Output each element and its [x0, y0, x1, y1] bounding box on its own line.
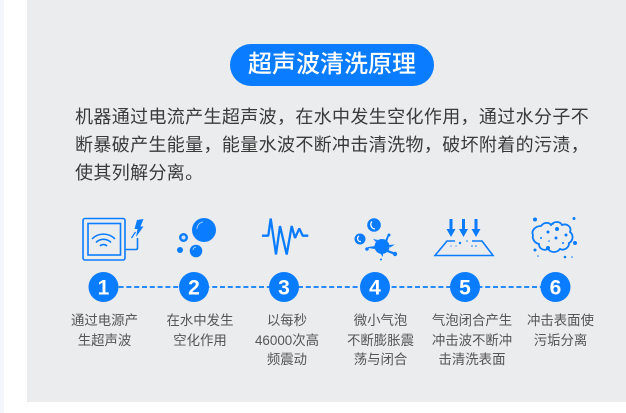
icon: vibration waveform — [262, 218, 308, 254]
title — [230, 44, 434, 86]
intro text block: 断暴破产生能量，能量水波不断冲击清洗物，破坏附着的污渍， — [75, 135, 589, 155]
step 4 text: 荡与闭合 — [354, 352, 407, 367]
step 3 badge — [269, 272, 299, 302]
step 2 text: 在水中发生 — [167, 313, 233, 328]
step 4 text — [347, 313, 414, 367]
step 3 badge: 3 — [278, 276, 290, 300]
step 5 text — [432, 313, 512, 367]
step 6 text: 污垢分离 — [534, 333, 587, 348]
step 3 text: 频震动 — [267, 352, 307, 367]
step 1 text: 生超声波 — [78, 333, 131, 348]
intro text block: 机器通过电流产生超声波，在水中发生空化作用，通过水分子不 — [75, 107, 589, 127]
step 3 text: 以每秒 — [267, 313, 307, 328]
step 3 text — [255, 313, 319, 367]
step 1 badge: 1 — [98, 276, 110, 300]
step 2 text — [167, 313, 233, 348]
step 1 text: 通过电源产 — [71, 313, 138, 328]
step 6 text — [527, 313, 594, 348]
icon: ultrasonic generator box with power — [83, 218, 144, 260]
step 6 badge — [540, 272, 570, 302]
step 4 badge: 4 — [369, 276, 381, 300]
step 6 badge: 6 — [550, 276, 561, 300]
step 5 badge: 5 — [459, 276, 471, 300]
icon: bubbles — [177, 218, 216, 257]
intro text block — [75, 107, 589, 183]
step 3 text: 46000次高 — [255, 333, 319, 348]
step 2 badge: 2 — [188, 276, 200, 300]
step 6 text: 冲击表面使 — [527, 313, 594, 328]
dashed connector line — [103, 286, 555, 288]
step 4 text: 不断膨胀震 — [347, 333, 414, 348]
step 5 text: 冲击波不断冲 — [432, 333, 512, 348]
step 2 text: 空化作用 — [173, 333, 227, 348]
step 1 badge — [88, 272, 118, 302]
step 5 text: 击清洗表面 — [439, 352, 505, 367]
step 5 text: 气泡闭合产生 — [432, 313, 512, 328]
step 2 badge — [179, 272, 209, 302]
icon: dirt cloud separating — [532, 217, 577, 258]
step 1 text — [71, 313, 138, 348]
intro text block: 使其列解分离。 — [75, 163, 204, 183]
step 5 badge — [450, 272, 480, 302]
step 4 text: 微小气泡 — [354, 313, 407, 328]
step 4 badge — [360, 272, 390, 302]
title: 超声波清洗原理 — [248, 51, 416, 78]
icon: shockwave pressing on surface — [435, 219, 493, 256]
icon: bubbles bursting on dirt — [354, 218, 397, 260]
